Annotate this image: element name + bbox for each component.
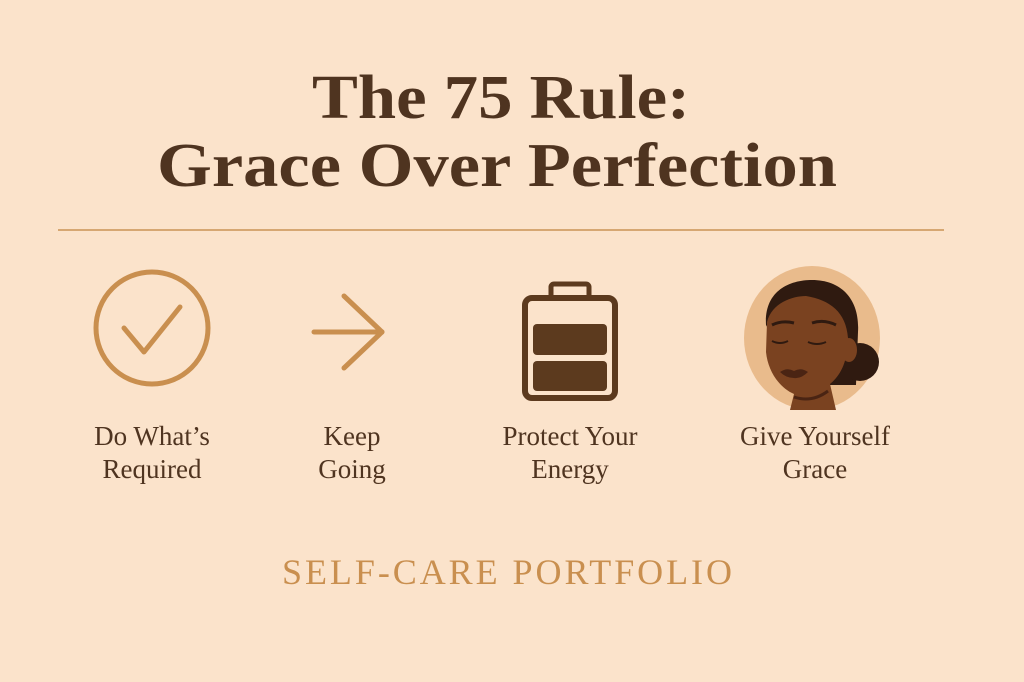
footer: SELF-CARE PORTFOLIO [282,552,732,592]
label: protect your energy: Protect Your [502,421,638,451]
label: keep going: Going [318,454,386,484]
icon: face portrait [744,266,880,410]
title: The 75 Rule: [312,64,690,132]
icon: arrow [314,296,382,368]
icon: battery [525,284,615,398]
label: give yourself grace: Grace [783,454,847,484]
title [157,64,837,200]
title: Grace Over Perfection [157,132,837,200]
icon: check circle [96,272,208,384]
label: give yourself grace: Give Yourself [740,421,890,451]
label: give yourself grace [740,421,890,484]
label: protect your energy: Energy [531,454,609,484]
label: do what's required: Do What’s [94,421,210,451]
label: protect your energy [502,421,638,484]
label: do what's required: Required [103,454,202,484]
label: keep going [318,421,386,484]
label: do what's required [94,421,210,484]
label: keep going: Keep [324,421,380,451]
